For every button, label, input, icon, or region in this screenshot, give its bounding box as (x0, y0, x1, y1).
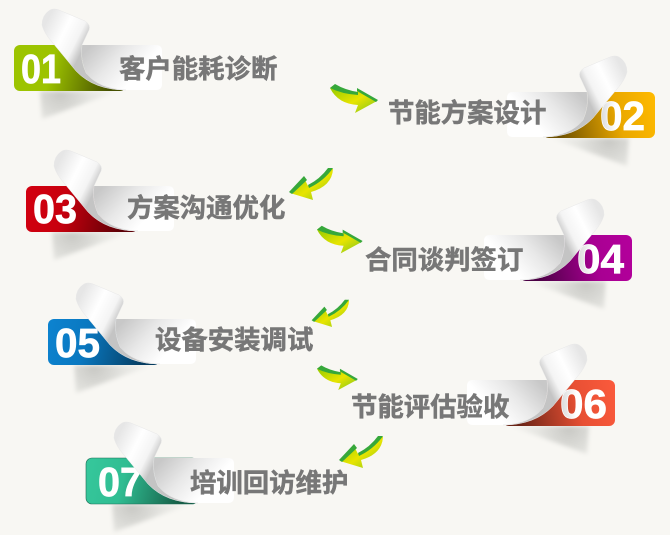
number 04: 04 (577, 236, 624, 282)
arrow 6 to 7 (339, 436, 383, 468)
number 07: 07 (98, 459, 142, 505)
number 02: 02 (600, 93, 645, 139)
arrow 3 to 4 (317, 226, 363, 253)
step 06 title: 节能评估验收 (351, 392, 509, 422)
step 01 title: 客户能耗诊断 (119, 54, 277, 84)
number 03: 03 (33, 186, 77, 232)
step 05 title: 设备安装调试 (155, 325, 313, 355)
step 01 label (14, 9, 277, 119)
step 03 label (26, 150, 285, 260)
number 01: 01 (21, 46, 61, 92)
step 02 title: 节能方案设计 (388, 98, 546, 128)
arrow 1 to 2 (330, 84, 378, 113)
step 06 label (351, 344, 615, 454)
step 03 title: 方案沟通优化 (127, 193, 285, 223)
step 04 label (365, 199, 632, 309)
step 07 label (86, 422, 348, 532)
arrow 5 to 6 (317, 365, 358, 390)
step 07 title: 培训回访维护 (190, 468, 348, 498)
number 06: 06 (560, 381, 607, 427)
step 04 title: 合同谈判签订 (365, 245, 523, 275)
arrow 2 to 3 (289, 168, 333, 200)
step 02 label (388, 56, 655, 166)
step 05 label (48, 283, 313, 393)
number 05: 05 (55, 320, 100, 366)
arrow 4 to 5 (312, 300, 349, 327)
